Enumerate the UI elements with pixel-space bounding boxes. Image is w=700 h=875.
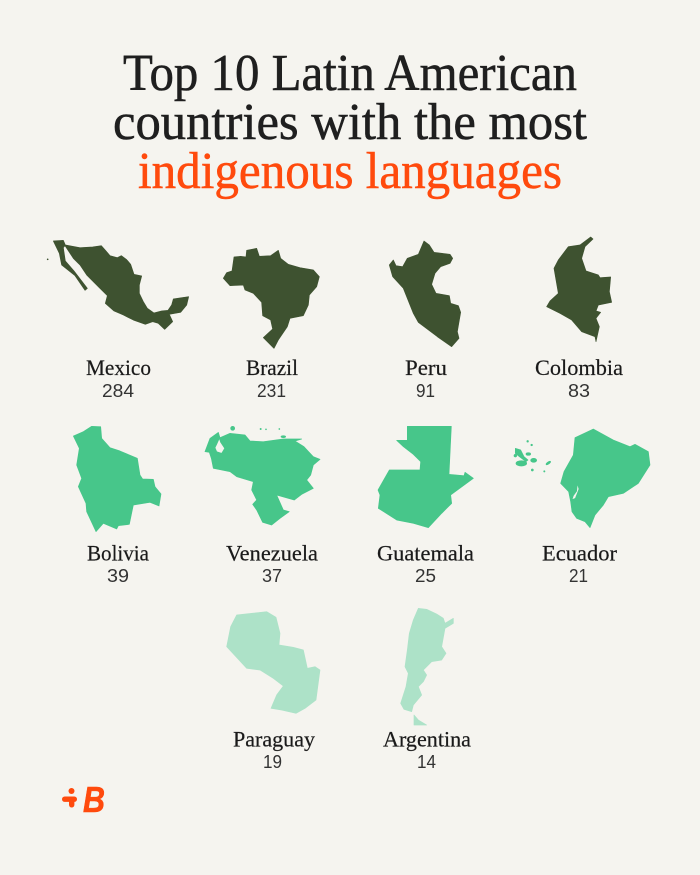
country: Mexico: 284 [102,380,134,401]
map: Guatemala [378,426,473,528]
map: Bolivia [73,426,161,532]
country: Peru: 91 [416,380,435,401]
country: Brazil: Brazil [246,355,298,380]
country: Ecuador: 21 [569,565,588,586]
country: Paraguay [227,612,320,772]
country: Ecuador [514,429,650,586]
country: Argentina: 14 [417,751,436,772]
map: Ecuador [514,429,650,528]
title: countries with the most [113,94,588,151]
country: Bolivia: Bolivia [87,540,149,566]
country: Paraguay: 19 [263,751,282,772]
country: Peru [389,241,461,401]
map: Colombia [547,237,612,342]
map: Paraguay [227,612,320,713]
country: Bolivia: 39 [107,565,129,586]
logo: division mark [62,788,77,808]
map: Mexico [47,240,189,329]
title [113,45,588,200]
map: Brazil [223,248,319,348]
country: Argentina [383,608,471,772]
country: Brazil: 231 [257,380,286,401]
country: Venezuela: 37 [262,565,282,586]
title: Top 10 Latin American [123,45,577,102]
country: Venezuela: Venezuela [226,540,318,566]
country: Guatemala: 25 [415,565,436,586]
country: Paraguay: Paraguay [233,726,316,752]
country: Ecuador: Ecuador [542,540,617,566]
country: Colombia: 83 [568,380,590,401]
country: Guatemala: Guatemala [377,540,474,566]
country: Bolivia [73,426,161,586]
country: Mexico: Mexico [86,355,151,380]
country: Peru: Peru [405,355,447,380]
country: Venezuela [205,426,320,586]
map: Peru [389,241,461,347]
country: Mexico [47,240,189,401]
logo [62,779,105,820]
country: Colombia: Colombia [535,355,623,380]
title: indigenous languages [138,143,562,200]
logo: B [83,779,105,820]
country: Brazil [223,248,319,401]
country: Colombia [535,237,623,401]
country: Guatemala [377,426,474,586]
country: Argentina: Argentina [383,726,471,752]
map: Argentina [401,608,453,725]
map: Venezuela [205,426,320,525]
